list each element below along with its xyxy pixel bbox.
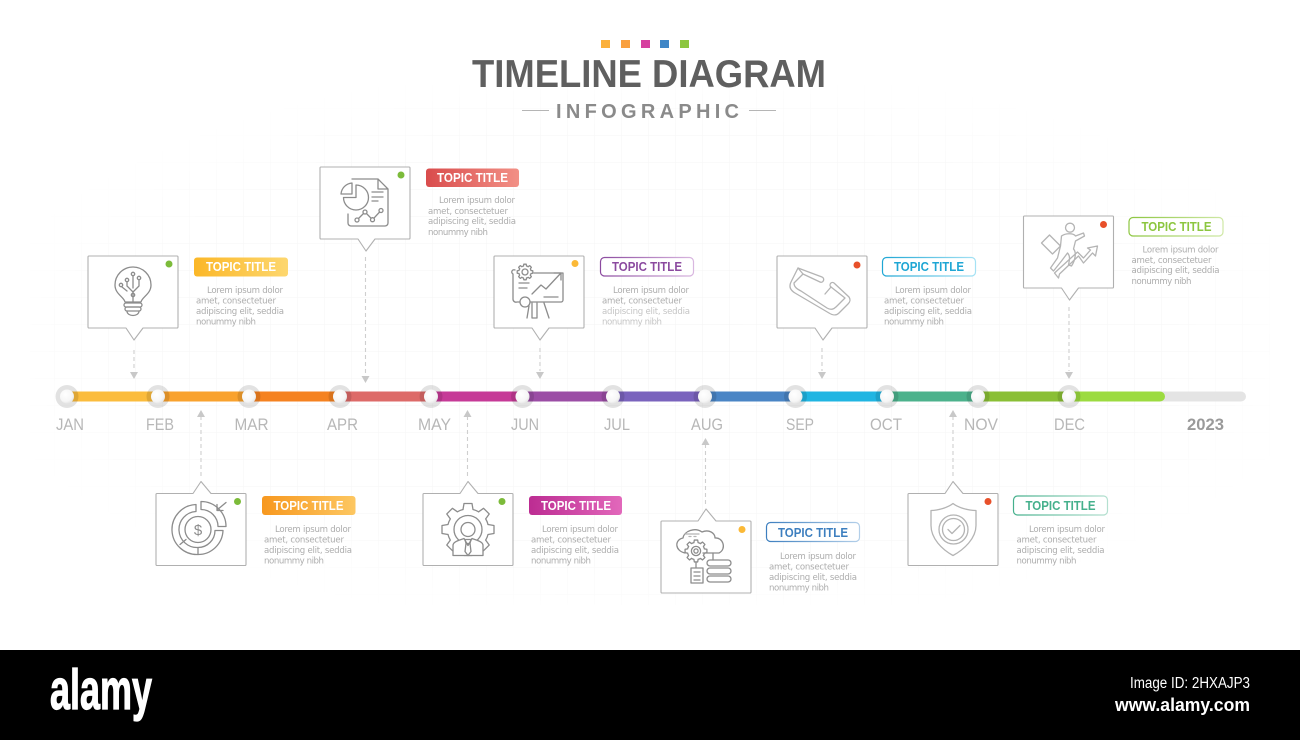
callout box (1024, 216, 1114, 300)
body text (531, 525, 619, 566)
month labels (56, 416, 1224, 434)
timeline bar (67, 392, 1246, 402)
month labels: 2023 (1187, 416, 1224, 434)
header decoration: colored squares (601, 40, 689, 48)
callout box (777, 256, 867, 340)
topic pill (529, 496, 622, 515)
title: TIMELINE DIAGRAM (472, 53, 826, 96)
faint grid backdrop (120, 122, 1181, 568)
icon: shield check (931, 504, 976, 556)
topic pill (882, 258, 976, 276)
body text: nonummy nibh (196, 318, 256, 328)
callout box (320, 167, 410, 251)
callout box (661, 509, 751, 593)
status dot (984, 498, 992, 505)
month labels: JAN (56, 416, 84, 434)
body text (884, 286, 972, 328)
panel: January lightbulb (88, 256, 288, 340)
panel: August cloud data (661, 509, 860, 594)
body text: Lorem ipsum dolor (275, 525, 351, 535)
icon: dollar target (172, 502, 226, 555)
body text: adipiscing elit, seddia (1132, 266, 1220, 276)
body text: amet, consectetuer (264, 536, 344, 546)
icon: presentation board (512, 264, 563, 318)
body text: nonummy nibh (1016, 556, 1076, 566)
month labels: OCT (870, 416, 902, 434)
body text: nonummy nibh (428, 228, 488, 238)
month labels: JUL (604, 416, 630, 434)
icon: cloud data (677, 530, 731, 583)
body text: adipiscing elit, seddia (602, 307, 690, 317)
topic title: TOPIC TITLE (437, 171, 508, 185)
month labels: SEP (786, 416, 814, 434)
topic pill (766, 522, 860, 542)
body text: adipiscing elit, seddia (428, 217, 516, 227)
month labels: APR (327, 416, 358, 434)
panel: April report (320, 167, 519, 251)
topic title: TOPIC TITLE (206, 260, 276, 274)
month labels: FEB (146, 416, 174, 434)
body text (1132, 246, 1220, 287)
body text: adipiscing elit, seddia (884, 307, 972, 317)
topic pill (262, 496, 356, 515)
status dot (738, 526, 746, 533)
topic pill (1014, 496, 1108, 515)
body text: nonummy nibh (531, 556, 591, 566)
topic pill (426, 168, 519, 187)
topic pill (600, 258, 694, 276)
status dot (166, 260, 172, 268)
body text: Lorem ipsum dolor (439, 196, 515, 206)
body text: amet, consectetuer (428, 207, 508, 217)
icon: dollar target: $ (194, 522, 203, 539)
body text (769, 552, 857, 594)
body text: adipiscing elit, seddia (1016, 546, 1104, 556)
status dot (398, 172, 404, 178)
body text: Lorem ipsum dolor (1142, 246, 1219, 256)
timeline nodes (56, 385, 1080, 408)
body text: amet, consectetuer (531, 536, 611, 546)
topic title: TOPIC TITLE (274, 499, 344, 513)
icon: lightbulb (115, 267, 151, 316)
topic title: TOPIC TITLE (1026, 499, 1096, 513)
topic title: TOPIC TITLE (541, 499, 611, 513)
footer bar (0, 650, 1300, 740)
body text: nonummy nibh (602, 318, 662, 328)
topic title: TOPIC TITLE (1142, 220, 1212, 234)
month labels: JUN (511, 416, 539, 434)
topic title: TOPIC TITLE (612, 260, 682, 274)
body text (1016, 525, 1105, 566)
icon: gear with person (442, 504, 494, 556)
callout box (908, 482, 998, 566)
body text: Lorem ipsum dolor (207, 286, 283, 296)
status dot (854, 262, 860, 268)
connector arrows: top callouts (130, 257, 1073, 383)
body text: nonummy nibh (1132, 277, 1192, 287)
body text: adipiscing elit, seddia (196, 307, 284, 317)
body text (602, 286, 690, 328)
topic title: TOPIC TITLE (778, 526, 848, 540)
icon: VR glasses (790, 268, 850, 315)
footer url: www.alamy.com (1114, 695, 1250, 715)
body text (428, 196, 516, 238)
body text: amet, consectetuer (1016, 536, 1097, 546)
body text: amet, consectetuer (769, 562, 849, 572)
body text: Lorem ipsum dolor (613, 286, 689, 296)
connector arrows: bottom callouts (197, 410, 957, 506)
panel: June presentation (494, 256, 694, 340)
body text (196, 286, 284, 328)
body text: nonummy nibh (884, 318, 944, 328)
body text: amet, consectetuer (602, 296, 682, 306)
panel: December climber (1024, 216, 1223, 300)
panel: May gear person (423, 482, 622, 566)
footer logo: alamy (50, 658, 152, 722)
subtitle: INFOGRAPHIC (556, 101, 743, 123)
panel: February finance (156, 482, 356, 566)
month labels: MAR (234, 416, 269, 434)
month labels: AUG (691, 416, 723, 434)
body text: amet, consectetuer (1132, 256, 1212, 266)
body text: amet, consectetuer (884, 296, 964, 306)
status dot (498, 498, 506, 505)
body text: nonummy nibh (769, 584, 829, 594)
footer image id: Image ID: 2HXAJP3 (1130, 675, 1250, 692)
topic pill (1129, 218, 1223, 236)
topic title: TOPIC TITLE (894, 260, 964, 274)
body text (264, 525, 352, 566)
month labels: DEC (1054, 416, 1085, 434)
icon: climbing businessman (1042, 223, 1098, 278)
body text: nonummy nibh (264, 556, 324, 566)
body text: amet, consectetuer (196, 296, 276, 306)
callout box (88, 256, 178, 340)
body text: adipiscing elit, seddia (531, 546, 619, 556)
body text: Lorem ipsum dolor (1029, 525, 1105, 535)
topic pill (194, 258, 288, 276)
panel: November shield (908, 482, 1108, 566)
body text: adipiscing elit, seddia (264, 546, 352, 556)
body text: adipiscing elit, seddia (769, 573, 857, 583)
body text: Lorem ipsum dolor (780, 552, 856, 562)
callout box (156, 482, 246, 566)
status dot (234, 498, 241, 505)
status dot (1100, 221, 1107, 228)
body text: Lorem ipsum dolor (542, 525, 618, 535)
month labels: NOV (964, 416, 998, 434)
icon: report with pie chart (341, 179, 388, 226)
body text: Lorem ipsum dolor (895, 286, 971, 296)
callout box (423, 482, 513, 566)
callout box (494, 256, 584, 340)
month labels: MAY (418, 416, 451, 434)
panel: September glasses (777, 256, 976, 340)
status dot (572, 260, 578, 267)
